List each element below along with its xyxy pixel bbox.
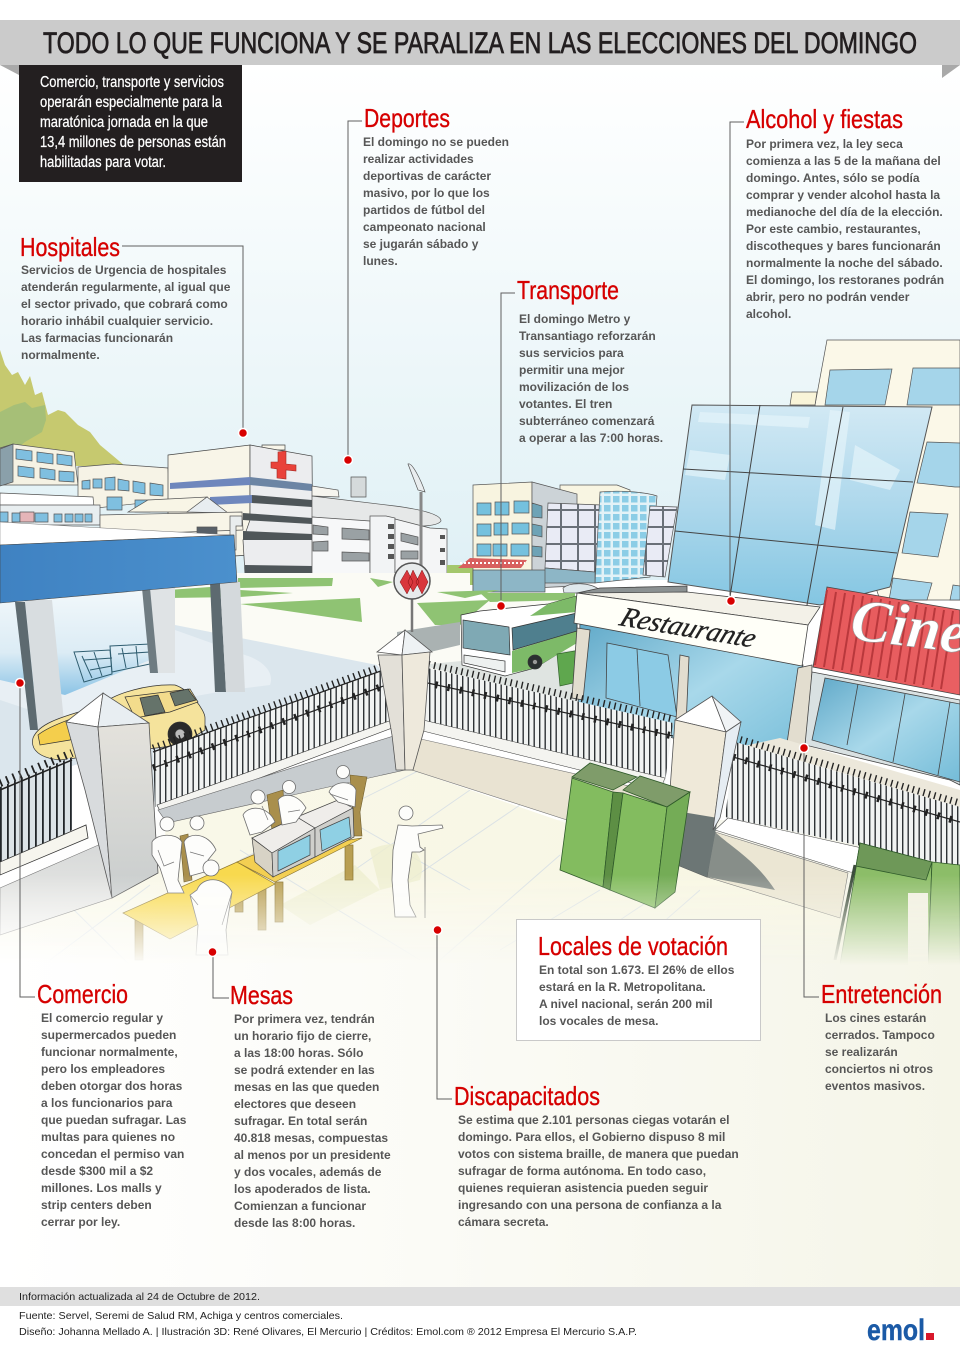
panel: Hospitales: Hospitales <box>20 232 120 262</box>
fence and wall: right of centre <box>412 660 674 820</box>
panel: Transporte: movilización de los <box>519 380 629 394</box>
plaza ground with lawns <box>175 573 578 702</box>
panel: Mesas: Por primera vez, tendrán <box>234 1012 375 1026</box>
green bin <box>556 650 575 686</box>
footer: Información actualizada al 24 de Octubre de 2012. <box>19 1291 260 1303</box>
panel: Transporte: sus servicios para <box>519 346 624 360</box>
gate posts <box>66 630 741 898</box>
intro text box: operarán especialmente para la <box>40 94 222 111</box>
panel: Comercio: multas para quienes no <box>41 1130 175 1144</box>
panel: Mesas: Mesas <box>230 980 293 1010</box>
panel: Mesas: sufragar. En total serán <box>234 1114 367 1128</box>
panel: Deportes <box>344 103 509 464</box>
panel: Comercio: El comercio regular y <box>41 1011 163 1025</box>
panel: Discapacitados <box>433 926 739 1229</box>
intro text box: maratónica jornada en la que <box>40 114 208 131</box>
hospital <box>168 445 313 574</box>
panel: Deportes: partidos de fútbol del <box>363 203 485 217</box>
panel: Deportes: realizar actividades <box>363 152 474 166</box>
panel: Discapacitados: Discapacitados <box>454 1081 600 1111</box>
panel: Entretención: Los cines estarán <box>825 1011 926 1025</box>
fence and wall: right <box>690 738 960 918</box>
icon: metro sign and street lamp <box>394 464 430 632</box>
panel: Deportes: se jugarán sábado y <box>363 237 479 251</box>
footer <box>0 1287 960 1349</box>
panel: Locales de votación: estará en la R. Metropolitana. <box>539 980 706 994</box>
panel: Locales de votación <box>516 920 760 1040</box>
glass building <box>668 405 932 605</box>
panel: Mesas: a las 18:00 horas. Sólo <box>234 1046 363 1060</box>
panel: Entretención <box>800 744 942 1093</box>
panel: Entretención: se realizarán <box>825 1045 898 1059</box>
leader line: Hospitales <box>122 246 248 438</box>
panel: Deportes: Deportes <box>364 103 450 133</box>
poll workers and voter <box>152 766 443 955</box>
panel: Locales de votación: A nivel nacional, serán 200 mil <box>539 997 713 1011</box>
stadium <box>312 477 447 578</box>
panel: Transporte: Transporte <box>517 275 619 305</box>
panel: Alcohol y fiestas: discotheques y bares funcionarán <box>746 239 941 253</box>
panel: Deportes: masivo, por lo que los <box>363 186 490 200</box>
voting booths <box>560 763 960 965</box>
cinema front <box>805 586 960 785</box>
panel: Alcohol y fiestas: El domingo, los restoranes podrán <box>746 273 944 287</box>
leader line: Discapacitados <box>433 926 452 1099</box>
footer: Diseño: Johanna Mellado A. | Ilustración 3D: René Olivares, El Mercurio | Créditos: Emol.com ® 2012 Empresa El Mercurio S.A.P. <box>19 1326 637 1338</box>
panel: Entretención: eventos masivos. <box>825 1079 925 1093</box>
panel: Mesas: y dos vocales, además de <box>234 1165 382 1179</box>
panel: Hospitales: normalmente. <box>21 348 100 362</box>
panel: Alcohol y fiestas: alcohol. <box>746 307 791 321</box>
panel: Comercio: que puedan sufragar. Las <box>41 1113 187 1127</box>
leader line: Transporte <box>496 293 515 610</box>
panel: Comercio: desde $300 mil a $2 <box>41 1164 153 1178</box>
panel: Deportes: campeonato nacional <box>363 220 486 234</box>
rear tower behind glass <box>790 340 960 600</box>
courtyard floor <box>18 738 960 944</box>
icon: red cross <box>271 451 296 479</box>
panel: Alcohol y fiestas: Alcohol y fiestas <box>746 104 903 134</box>
panel: Alcohol y fiestas: domingo. Antes, sólo se podía <box>746 171 920 185</box>
panel: Alcohol y fiestas: comprar y vender alcohol hasta la <box>746 188 940 202</box>
panel: Comercio: deben otorgar dos horas <box>41 1079 183 1093</box>
leader line: Deportes <box>344 121 362 464</box>
bus <box>461 596 577 676</box>
leader line: Alcohol y fiestas <box>726 122 744 606</box>
panel: Discapacitados: Se estima que 2.101 personas ciegas votarán el <box>458 1113 729 1127</box>
panel: Discapacitados: cámara secreta. <box>458 1215 549 1229</box>
panel: Transporte: votantes. El tren <box>519 397 612 411</box>
logo: emol: emol <box>867 1314 925 1347</box>
panel: Hospitales: Servicios de Urgencia de hospitales <box>21 263 227 277</box>
panel: Transporte: El domingo Metro y <box>519 312 631 326</box>
panel: Comercio: a los funcionarios para <box>41 1096 173 1110</box>
yellow car <box>32 685 205 760</box>
panel: Hospitales: horario inhábil cualquier servicio. <box>21 314 213 328</box>
panel: Discapacitados: quienes requieran asistencia pueden seguir <box>458 1181 708 1195</box>
panel: Comercio: Comercio <box>37 979 128 1009</box>
panel: Mesas: se podrá extender en las <box>234 1063 375 1077</box>
panel: Locales de votación: En total son 1.673. El 26% de ellos <box>539 963 735 977</box>
ballot boxes <box>252 800 354 877</box>
mid-distance buildings <box>447 482 677 593</box>
panel: Alcohol y fiestas: Por este cambio, restaurantes, <box>746 222 921 236</box>
panel: Alcohol y fiestas <box>726 104 944 606</box>
panel: Alcohol y fiestas: normalmente la noche del sábado. <box>746 256 943 270</box>
panel: Hospitales <box>20 232 248 438</box>
left apartment buildings <box>0 444 170 525</box>
panel: Transporte: a operar a las 7:00 horas. <box>519 431 663 445</box>
panel: Hospitales: el sector privado, que cobrará como <box>21 297 228 311</box>
panel: Locales de votación: los vocales de mesa. <box>539 1014 658 1028</box>
restaurant front <box>572 586 821 746</box>
panel: Alcohol y fiestas: medianoche del día de la elección. <box>746 205 943 219</box>
white post in the foreground <box>908 893 928 968</box>
panel: Alcohol y fiestas: Por primera vez, la ley seca <box>746 137 903 151</box>
panel: Discapacitados: ingresando con una persona de confianza a la <box>458 1198 722 1212</box>
chairs <box>180 775 367 882</box>
panel: Alcohol y fiestas: abrir, pero no podrán vender <box>746 290 910 304</box>
panel: Hospitales: atenderán regularmente, al igual que <box>21 280 231 294</box>
panel: Comercio: strip centers deben <box>41 1198 152 1212</box>
leader line: Entretención <box>800 744 819 997</box>
panel: Comercio: millones. Los malls y <box>41 1181 162 1195</box>
leader line: Comercio <box>16 678 35 997</box>
panel: Discapacitados: domingo. Para ellos, el Gobierno dispuso 8 mil <box>458 1130 725 1144</box>
panel: Alcohol y fiestas: comienza a las 5 de la mañana del <box>746 154 941 168</box>
header band <box>0 20 960 78</box>
panel: Deportes: deportivas de carácter <box>363 169 491 183</box>
panel: Mesas: electores que deseen <box>234 1097 356 1111</box>
panel: Mesas: desde las 8:00 horas. <box>234 1216 355 1230</box>
intro text box: habilitadas para votar. <box>40 154 166 171</box>
panel: Comercio <box>16 678 187 1229</box>
icon: floodlight <box>351 477 366 497</box>
gas station and forecourt <box>0 522 395 805</box>
panel: Transporte <box>496 275 663 610</box>
panel: Transporte: Transantiago reforzarán <box>519 329 656 343</box>
panel: Entretención: cerrados. Tampoco <box>825 1028 935 1042</box>
panel: Transporte: subterráneo comenzará <box>519 414 655 428</box>
panel: Comercio: concedan el permiso van <box>41 1147 184 1161</box>
shopping carts <box>74 644 150 682</box>
awning <box>458 558 527 568</box>
panel: Comercio: pero los empleadores <box>41 1062 165 1076</box>
intro text box <box>19 65 242 182</box>
panel: Mesas: 40.818 mesas, compuestas <box>234 1131 388 1145</box>
panel: Transporte: permitir una mejor <box>519 363 625 377</box>
footer: Fuente: Servel, Seremi de Salud RM, Achiga y centros comerciales. <box>19 1310 343 1322</box>
panel: Comercio: cerrar por ley. <box>41 1215 120 1229</box>
polling tables <box>123 838 362 960</box>
panel: Mesas: Comienzan a funcionar <box>234 1199 366 1213</box>
fence and wall: left <box>0 753 112 935</box>
panel: Mesas <box>208 948 391 1230</box>
panel: Discapacitados: votos con sistema braille, de manera que puedan <box>458 1147 739 1161</box>
panel: Discapacitados: sufragar de forma autónoma. En todo caso, <box>458 1164 706 1178</box>
panel: Hospitales: Las farmacias funcionarán <box>21 331 173 345</box>
panel: Comercio: funcionar normalmente, <box>41 1045 178 1059</box>
panel: Deportes: El domingo no se pueden <box>363 135 509 149</box>
panel: Mesas: un horario fijo de cierre, <box>234 1029 371 1043</box>
panel: Deportes: lunes. <box>363 254 398 268</box>
leader line: Mesas <box>208 948 229 998</box>
panel: Locales de votación: Locales de votación <box>538 931 728 961</box>
blue canopy band <box>0 535 237 603</box>
restaurant sign lettering: Restaurante <box>614 602 761 654</box>
panel: Mesas: mesas en las que queden <box>234 1080 379 1094</box>
fence and wall: centre <box>153 663 405 823</box>
panel: Mesas: al menos por un presidente <box>234 1148 391 1162</box>
panel: Comercio: supermercados pueden <box>41 1028 176 1042</box>
panel: Entretención: conciertos ni otros <box>825 1062 933 1076</box>
small pavilion <box>100 497 243 550</box>
intro text box: Comercio, transporte y servicios <box>40 74 224 91</box>
panel: Mesas: los apoderados de lista. <box>234 1182 371 1196</box>
illustration: election-day city scene <box>0 340 960 1000</box>
intro text box: 13,4 millones de personas están <box>40 134 226 151</box>
hill <box>0 350 125 466</box>
